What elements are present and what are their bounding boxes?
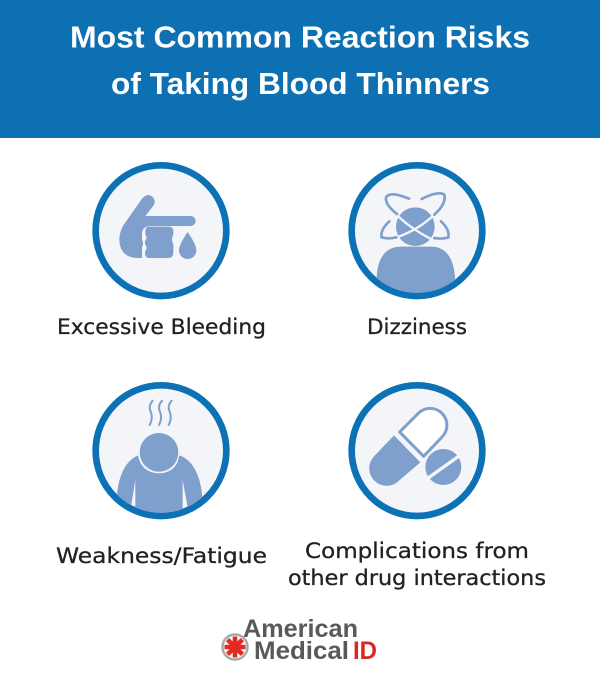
header banner <box>0 0 600 138</box>
label: Weakness/Fatigue <box>56 544 267 569</box>
icon: bleeding finger <box>96 165 226 296</box>
logo: American Medical ID <box>222 615 377 665</box>
logo: American Medical ID: Medical <box>254 637 349 665</box>
panel: excessive bleeding <box>57 165 266 340</box>
panel: dizziness <box>352 165 482 340</box>
logo: American Medical ID: American <box>243 615 358 643</box>
label: Complications from <box>305 539 529 564</box>
label <box>288 539 546 591</box>
icon: dizzy person <box>352 165 482 297</box>
title: of Taking Blood Thinners <box>111 66 490 101</box>
icon: fatigued person <box>96 385 226 517</box>
title: Most Common Reaction Risks <box>70 20 530 54</box>
panel: weakness/fatigue <box>56 385 267 569</box>
icon: medical asterisk <box>222 634 248 660</box>
icon: capsule and tablet <box>352 385 482 516</box>
logo: American Medical ID: ID <box>353 637 377 665</box>
label: other drug interactions <box>288 566 546 591</box>
panel: drug interactions <box>288 385 546 591</box>
label: Excessive Bleeding <box>57 315 266 340</box>
label: Dizziness <box>367 315 467 340</box>
title <box>70 20 530 101</box>
